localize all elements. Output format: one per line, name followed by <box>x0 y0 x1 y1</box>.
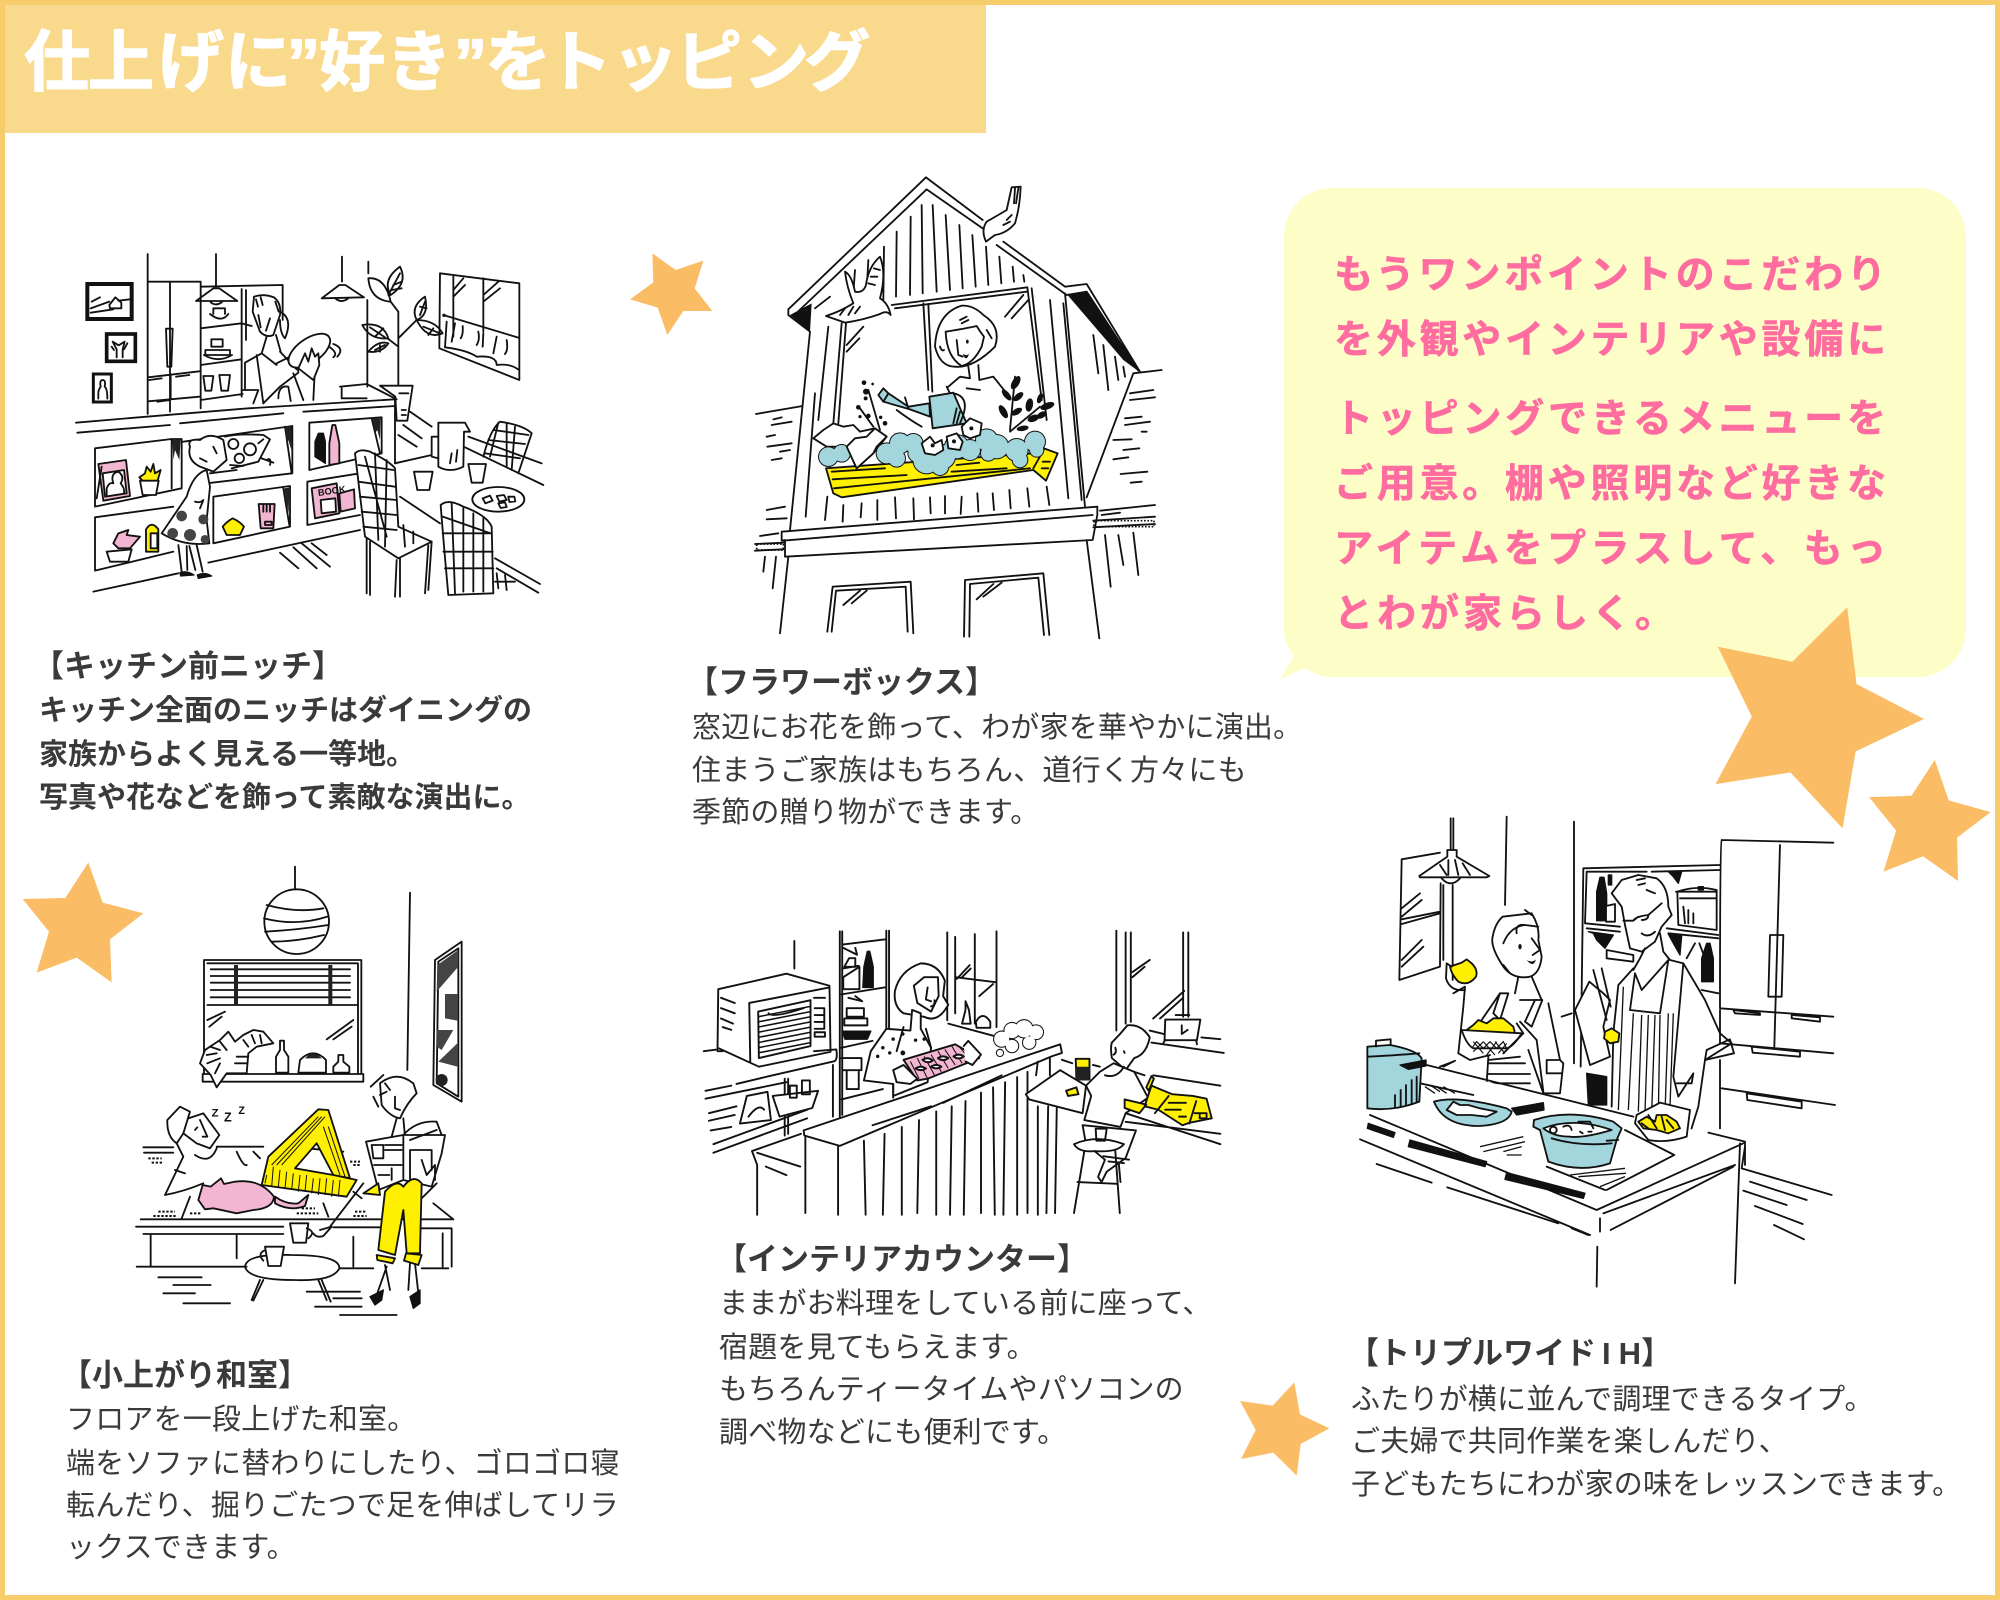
text block: interior counter: 【インテリアカウンター】 <box>716 1242 1088 1277</box>
text block: flower box: 季節の贈り物ができます。 <box>692 796 1040 829</box>
plate of fruit <box>1635 1103 1690 1141</box>
text block: interior counter: もちろんティータイムやパソコンの <box>719 1374 1184 1406</box>
star: bottom right <box>1240 1382 1329 1476</box>
text block: flower box: 窓辺にお花を飾って、わが家を華やかに演出。 <box>692 711 1302 744</box>
shelf behind <box>1581 865 1720 1105</box>
text block: triple wide IH: 【トリプルワイドI H】 <box>1348 1336 1672 1371</box>
pendant lamps <box>196 254 364 304</box>
paper lantern <box>264 867 329 954</box>
sleeping woman: Z <box>238 1105 245 1117</box>
white leaves <box>813 423 887 468</box>
bubble text: ご用意。棚や照明など好きな <box>1334 463 1886 506</box>
bubble text: もうワンポイントのこだわり <box>1334 254 1886 297</box>
teal foliage <box>818 418 1046 476</box>
woman at window <box>935 306 1007 400</box>
woman drying plate <box>242 295 340 403</box>
text block: interior counter: 宿題を見てもらえます。 <box>719 1331 1036 1364</box>
coffee table and mugs <box>245 1223 339 1302</box>
window and curtain <box>439 273 519 380</box>
illustration: flower box dormer <box>755 177 1162 638</box>
star: bubble small <box>1869 760 1991 881</box>
bubble shape <box>1280 188 1966 679</box>
yellow flower box <box>826 448 1058 497</box>
illustration: raised tatami room <box>136 867 462 1315</box>
text block: flower box: 【フラワーボックス】 <box>687 665 996 700</box>
text block: kitchen niche: 写真や花などを飾って素敵な演出に。 <box>39 781 531 814</box>
fridge cabinet <box>1720 840 1835 1239</box>
house plant <box>362 262 443 421</box>
central counter <box>752 1044 1062 1215</box>
text block: raised tatami room <box>61 1358 620 1564</box>
sleeping woman: Z <box>212 1108 219 1120</box>
star: bubble large <box>1715 607 1924 828</box>
text block: kitchen niche <box>33 649 532 814</box>
belt course and facade below <box>755 505 1155 638</box>
fridge and cupboard <box>148 254 283 414</box>
text block: triple wide IH <box>1348 1336 1961 1501</box>
text block: raised tatami room: 転んだり、掘りごたつで足を伸ばしてリラ <box>66 1489 619 1522</box>
shelf and bottles <box>704 931 889 1153</box>
window with blind <box>200 960 363 1087</box>
text block: interior counter: 調べ物などにも便利です。 <box>719 1416 1067 1449</box>
title: 仕上げに”好き”をトッピング <box>24 25 870 99</box>
microwave oven <box>718 941 831 1067</box>
window behind <box>947 931 996 1036</box>
text block: interior counter: ままがお料理をしている前に座って、 <box>719 1287 1212 1320</box>
bubble text: アイテムをプラスして、もっ <box>1334 528 1886 571</box>
bench <box>136 1147 453 1315</box>
text block: raised tatami room: 端をソファに替わりにしたり、ゴロゴロ寝 <box>66 1447 620 1480</box>
star: left <box>23 862 143 982</box>
dining chairs and table <box>355 412 543 597</box>
star: top middle <box>630 253 712 335</box>
bubble text: トッピングできるメニューを <box>1334 398 1886 441</box>
teal stock pot <box>1367 1039 1426 1109</box>
text block: raised tatami room: 【小上がり和室】 <box>61 1358 309 1393</box>
text block: flower box <box>687 665 1302 829</box>
cooktop island <box>1360 1061 1745 1287</box>
text block: interior counter <box>716 1242 1212 1449</box>
bird on roof <box>983 187 1021 242</box>
illustration: triple wide IH <box>1360 817 1835 1287</box>
pendant lamp and window <box>1399 817 1574 1063</box>
wall picture frames <box>87 284 135 402</box>
houseplant on counter <box>993 1019 1044 1057</box>
text block: triple wide IH: ふたりが横に並んで調理できるタイプ。 <box>1351 1383 1874 1416</box>
text block: raised tatami room: ックスできます。 <box>66 1532 296 1564</box>
man with apron <box>1575 875 1734 1133</box>
window frame <box>833 287 1047 423</box>
counter with niches: BOOK <box>317 484 347 498</box>
text block: kitchen niche: 家族からよく見える一等地。 <box>39 738 415 771</box>
text block: kitchen niche: 【キッチン前ニッチ】 <box>33 649 343 684</box>
sleeping woman <box>165 1105 357 1197</box>
text block: triple wide IH: ご夫婦で共同作業を楽しんだり、 <box>1351 1425 1788 1458</box>
bird left <box>826 257 891 323</box>
counter with niches <box>76 384 397 592</box>
roof behind <box>756 370 1162 497</box>
sleeping woman: Z <box>224 1111 232 1125</box>
dormer gable <box>788 177 1140 530</box>
child at bar counter <box>1026 931 1224 1215</box>
watering can <box>878 388 967 428</box>
teal casserole <box>1533 1115 1622 1168</box>
bubble text: を外観やインテリアや設備に <box>1334 319 1886 362</box>
title banner <box>5 5 986 133</box>
black leaves and berry sprigs <box>856 374 1055 432</box>
reading woman <box>313 1075 445 1308</box>
text block: flower box: 住まうご家族はもちろん、道行く方々にも <box>692 754 1247 787</box>
pink cat <box>198 1178 308 1213</box>
woman holding tray <box>864 963 981 1098</box>
illustration: interior counter <box>704 931 1224 1215</box>
frying pan <box>1434 1099 1544 1126</box>
bubble text <box>1334 254 1886 636</box>
mother with polka dot dress <box>162 436 237 578</box>
speech bubble <box>1280 188 1966 679</box>
bubble text: とわが家らしく。 <box>1334 593 1674 636</box>
text block: triple wide IH: 子どもたちにわが家の味をレッスンできます。 <box>1351 1468 1961 1501</box>
woman with tomato <box>1440 910 1572 1093</box>
text block: raised tatami room: フロアを一段上げた和室。 <box>66 1403 416 1436</box>
wall line and art panel <box>407 893 462 1102</box>
illustration: kitchen niche <box>76 254 543 597</box>
text block: kitchen niche: キッチン全面のニッチはダイニングの <box>39 693 532 727</box>
